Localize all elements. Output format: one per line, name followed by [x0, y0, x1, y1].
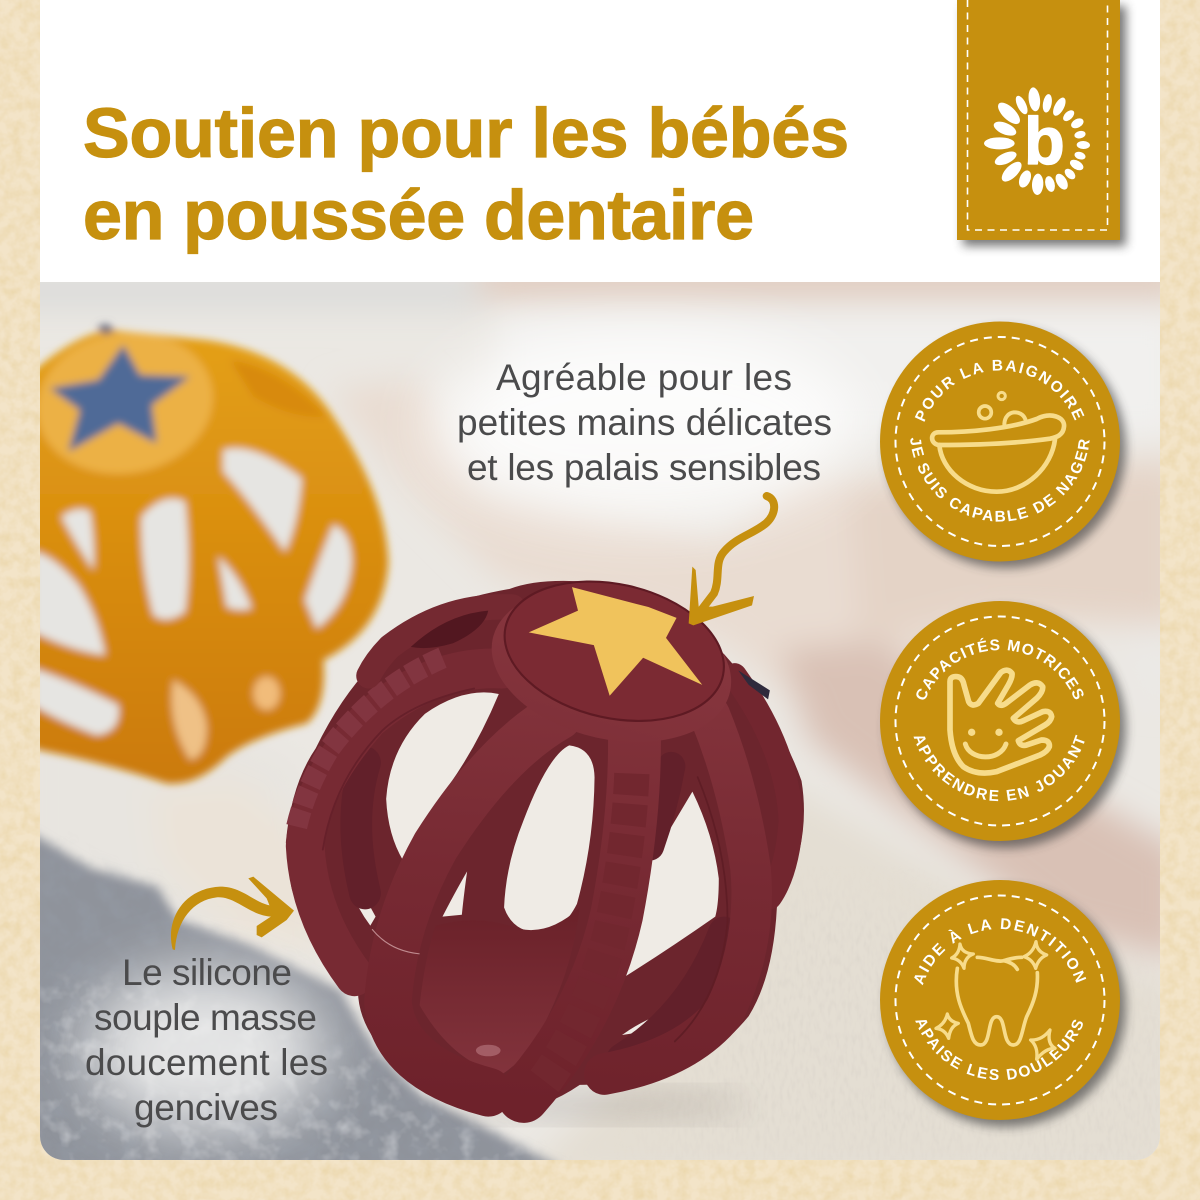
text glow: bottom caption [85, 970, 325, 1130]
badge: teething [880, 880, 1132, 1134]
right front rib [604, 716, 752, 1074]
logo: sunflower b [984, 87, 1090, 195]
badge text: motor skills [914, 638, 1085, 802]
caption: bottom: doucement les [85, 1042, 328, 1083]
badge text: teething [914, 918, 1086, 1080]
arrow: to star cap [689, 496, 774, 625]
dark star peeking out [738, 670, 770, 699]
far ribs [356, 763, 724, 1060]
title [83, 94, 849, 254]
caption: top: Agréable pour les [496, 357, 792, 398]
icon: smiling hand [950, 670, 1052, 773]
caption: top: et les palais sensibles [467, 447, 821, 488]
badge text: teething: APAISE LES DOULEURS [915, 1020, 1083, 1080]
ribbon tag with logo [957, 0, 1126, 246]
interior floor [420, 916, 570, 1073]
textured front rib [523, 730, 634, 1096]
arrow: to silicone rib [171, 877, 294, 950]
caption: top: petites mains délicates [457, 402, 832, 443]
badge text: bath [910, 360, 1090, 522]
front diagonal rib [372, 716, 559, 1092]
badge text: motor skills: CAPACITÉS MOTRICES [916, 638, 1084, 700]
text glow: top caption [430, 330, 860, 520]
badge text: motor skills: APPRENDRE EN JOUANT [914, 734, 1085, 802]
badge text: teething: AIDE À LA DENTITION [914, 918, 1086, 986]
burgundy teether [286, 562, 804, 1111]
caption: top [457, 357, 832, 488]
badge text: bath: JE SUIS CAPABLE DE NAGER [910, 438, 1090, 522]
yellow teether, blurred [20, 319, 388, 784]
star cap [504, 580, 725, 722]
badge: bath [879, 321, 1132, 574]
caption: bottom: souple masse [94, 997, 317, 1038]
icon: sparkling tooth [936, 942, 1055, 1059]
outer right rib [735, 676, 791, 897]
title: en poussée dentaire [83, 176, 754, 254]
left textured rib [296, 658, 502, 976]
soft shadow beneath burgundy ball [450, 1091, 750, 1119]
caption: bottom: Le silicone [122, 952, 292, 993]
grey towel [30, 832, 565, 1170]
panel: product photo [0, 262, 1180, 1180]
photo backdrop: blurred blanket [0, 262, 1180, 1180]
badge: motor skills [880, 601, 1132, 854]
logo: sunflower b: b [1024, 105, 1065, 179]
openings showing background [342, 692, 719, 1035]
icon: bath tub [932, 392, 1064, 492]
hub around cap [492, 608, 731, 740]
upper left arch [369, 607, 513, 676]
title: Soutien pour les bébés [83, 94, 849, 172]
teether silhouette [286, 581, 804, 1111]
panel: white title header [40, 0, 1160, 283]
caption: bottom: gencives [134, 1087, 278, 1128]
caption: bottom [85, 952, 328, 1128]
badge text: bath: POUR LA BAIGNOIRE [914, 360, 1084, 422]
